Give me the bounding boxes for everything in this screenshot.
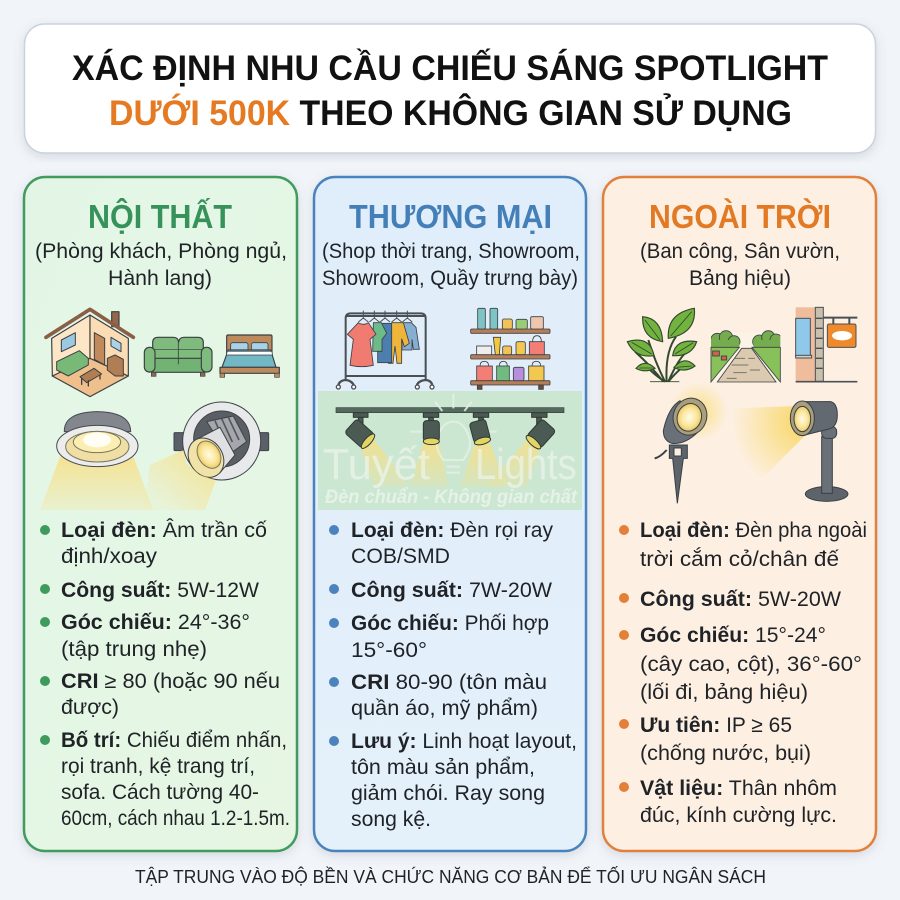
bullet: loại đèn: Loại đèn: Đèn pha ngoài <box>640 518 867 542</box>
icon: product shelves <box>471 308 550 389</box>
bullet: loại đèn: trời cắm cỏ/chân đế <box>640 546 839 571</box>
bullet: lưu ý: giảm chói. Ray song <box>351 781 545 805</box>
bullet: lưu ý: Lưu ý: Linh hoạt layout, <box>351 729 577 753</box>
bullet: cri <box>329 670 547 720</box>
heading: thương mại: THƯƠNG MẠI <box>349 199 552 236</box>
bullet: lưu ý <box>329 729 577 831</box>
bullet: cri: CRI 80-90 (tôn màu <box>351 670 547 694</box>
bullet: ưu tiên: Ưu tiên: IP ≥ 65 <box>640 713 792 737</box>
heading: ngoài trời: NGOÀI TRỜI <box>649 198 831 236</box>
watermark: logo text: Tuyết <box>323 440 430 489</box>
bullet: vật liệu: Vật liệu: Thân nhôm <box>640 776 837 800</box>
icon: stand spotlight <box>790 401 848 501</box>
bullet: ưu tiên <box>619 713 811 765</box>
subtitle: ngoài trời: (Ban công, Sân vườn, <box>640 239 840 263</box>
bullet: góc chiếu: (tập trung nhẹ) <box>61 637 207 661</box>
bullet: loại đèn <box>329 518 553 568</box>
bullet list: ngoài trời <box>619 518 867 827</box>
bullet: bố trí: sofa. Cách tường 40- <box>61 780 259 804</box>
bullet: góc chiếu: Góc chiếu: 15°-24° <box>640 623 826 647</box>
bullet: công suất: Công suất: 5W-12W <box>61 578 260 602</box>
bullet: cri: quần áo, mỹ phẩm) <box>351 696 538 720</box>
icon: shop sign <box>796 307 857 382</box>
icons: clothes rack, shelf, track light: Lights <box>475 440 577 489</box>
icon: fixed downlight <box>57 412 138 467</box>
icon: green sofa <box>144 337 212 376</box>
light beam: adjustable downlight <box>143 450 216 510</box>
footer note: TẬP TRUNG VÀO ĐỘ BỀN VÀ CHỨC NĂNG CƠ BẢN ĐỂ TỐI ƯU NGÂN SÁCH <box>135 866 766 887</box>
light beam: stand light <box>730 406 804 494</box>
bullet: bố trí <box>40 728 290 830</box>
title card <box>24 24 876 153</box>
title line 1: XÁC ĐỊNH NHU CẦU CHIẾU SÁNG SPOTLIGHT <box>72 48 828 88</box>
bullet: góc chiếu: 15°-60° <box>351 638 427 662</box>
icon: spike spotlight <box>655 393 712 503</box>
icons: room, sofa, bed, downlights <box>40 309 279 510</box>
bullet: bố trí: rọi tranh, kệ trang trí, <box>61 754 255 778</box>
panel: nội thất <box>24 177 297 851</box>
subtitle: ngoài trời <box>640 239 840 290</box>
light glow: spike light <box>668 382 728 442</box>
bullet: góc chiếu <box>329 611 549 662</box>
watermark: tagline: Đèn chuẩn - Không gian chất <box>325 487 578 508</box>
bullet: loại đèn: định/xoay <box>61 544 157 568</box>
bullet: loại đèn: Loại đèn: Âm trần cố <box>61 517 267 542</box>
subtitle: nội thất <box>35 239 287 290</box>
light beam: downlight <box>40 457 153 510</box>
bullet: cri <box>40 669 280 719</box>
bullet: loại đèn: COB/SMD <box>351 544 450 568</box>
icon: garden path <box>707 327 785 382</box>
panel: ngoài trời <box>603 177 876 851</box>
subtitle: thương mại: Showroom, Quầy trưng bày) <box>322 266 578 290</box>
subtitle: thương mại <box>322 239 580 290</box>
bullet: ưu tiên: (chống nước, bụi) <box>640 741 811 765</box>
bullet: góc chiếu: (cây cao, cột), 36°-60° <box>640 652 862 676</box>
bullet: góc chiếu <box>40 610 250 661</box>
icon: isometric house <box>46 309 133 397</box>
subtitle: thương mại: (Shop thời trang, Showroom, <box>322 239 580 263</box>
subtitle: nội thất: Hành lang) <box>108 266 212 290</box>
bullet: lưu ý: tôn màu sản phẩm, <box>351 755 535 779</box>
icon: clothes rack <box>336 311 434 389</box>
bullet: loại đèn <box>619 518 867 571</box>
bullet: vật liệu <box>619 776 837 827</box>
bullet: vật liệu: đúc, kính cường lực. <box>640 803 837 827</box>
icons: four track heads <box>344 413 556 451</box>
watermark band <box>318 391 582 510</box>
watermark: bulb <box>410 393 497 473</box>
bullet list: nội thất <box>40 517 290 830</box>
bullet: cri: CRI ≥ 80 (hoặc 90 nếu <box>61 669 280 693</box>
icon: plant <box>627 308 697 382</box>
bullet: bố trí: 60cm, cách nhau 1.2-1.5m. <box>61 806 290 830</box>
bullet: góc chiếu: (lối đi, bảng hiệu) <box>640 680 808 704</box>
title line 2 with orange highlight: DƯỚI 500K THEO KHÔNG GIAN SỬ DỤNG <box>109 93 792 133</box>
bullet: cri: được) <box>61 695 119 719</box>
subtitle: ngoài trời: Bảng hiệu) <box>689 266 791 290</box>
subtitle: nội thất: (Phòng khách, Phòng ngủ, <box>35 239 287 263</box>
icons: plant, garden path, sign, spotlights <box>627 307 857 503</box>
heading: nội thất: NỘI THẤT <box>88 197 232 236</box>
icon: track rail <box>336 408 564 413</box>
icon: adjustable downlight <box>174 402 269 484</box>
bullet: góc chiếu <box>619 623 862 704</box>
bullet: công suất: Công suất: 7W-20W <box>351 578 553 602</box>
bullet list: thương mại <box>329 518 577 831</box>
panel: thương mại <box>314 177 586 851</box>
bullet: công suất: Công suất: 5W-20W <box>640 587 842 611</box>
icon: bed <box>220 335 279 377</box>
bullet: góc chiếu: Góc chiếu: 24°-36° <box>61 610 250 634</box>
bullet: góc chiếu: Góc chiếu: Phối hợp <box>351 611 549 635</box>
bullet: bố trí: Bố trí: Chiếu điểm nhấn, <box>61 728 287 752</box>
bullet: lưu ý: song kệ. <box>351 807 431 831</box>
light beams <box>360 437 542 487</box>
bullet: loại đèn <box>40 517 267 568</box>
bullet: loại đèn: Loại đèn: Đèn rọi ray <box>351 518 553 542</box>
icons: clothes rack, shelf, track light <box>323 308 577 489</box>
